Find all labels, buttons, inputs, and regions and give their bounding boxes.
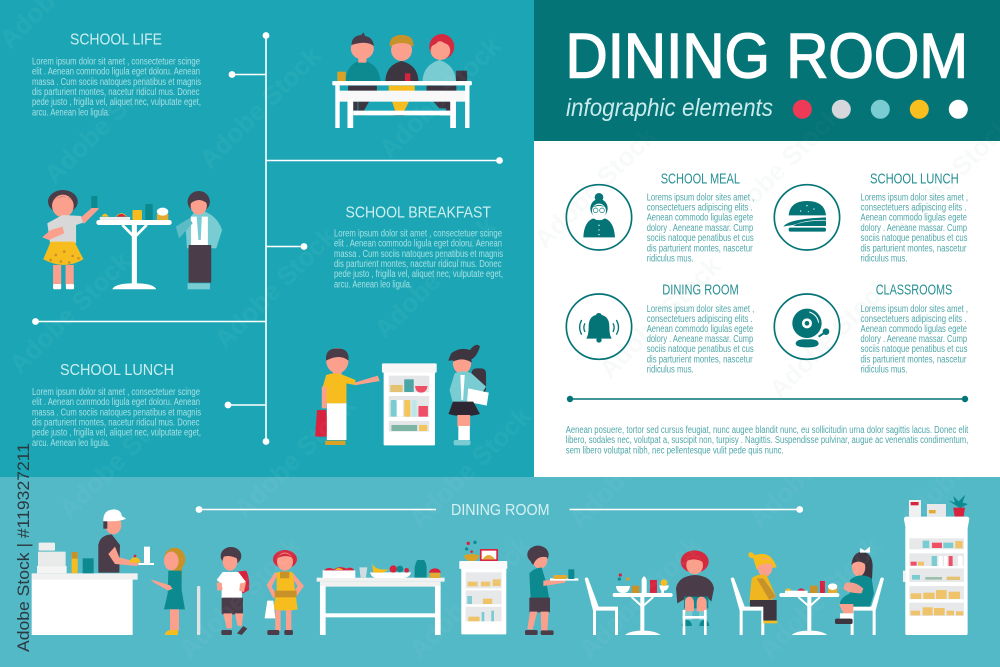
seated girl with red hair [676,550,714,635]
text block: school breakfast: Lorem ipsum dolor sit amet , consectetuer scinge [334,228,502,240]
text block: school lunch (right): consectetuers adipiscing elits . [860,203,966,214]
text block: dining room: Aenean commodo ligulas egete [647,324,754,335]
watermark: faint repeated stock marks: Adobe Stock [38,55,172,189]
text block: dining room: dolory . Aeneane massar. Cump [647,334,754,345]
text block: school lunch (right): Aenean commodo ligulas egete [860,213,967,224]
pastry case with flowers and picture [459,541,507,634]
watermark: faint repeated stock marks: Adobe Stock [208,220,342,354]
watermark: faint repeated stock marks: Adobe Stock [563,400,697,534]
boy in yellow [315,348,378,445]
watermark: faint repeated stock marks: Adobe Stock [193,40,327,174]
panel: bottom dining room strip [0,477,1000,667]
illustration: girl and boy at table [42,190,222,289]
watermark: faint repeated stock marks: Adobe Stock [228,390,362,524]
text block: school lunch (right): sociis natoque penatibus et cus [860,233,968,244]
watermark: faint repeated stock marks: Adobe Stock [373,30,507,164]
girl in yellow dress [265,550,304,635]
menu board and plant [909,495,968,517]
watermark: faint repeated stock marks: Adobe Stock [763,270,897,404]
watermark: faint repeated stock marks: Adobe Stock [3,245,137,379]
text block: school breakfast [334,204,503,290]
icon section: white panel content [566,185,840,359]
text block: school breakfast: dis parturient montes, nacetur ridicul mus. Donec [334,259,502,270]
text block: school breakfast: SCHOOL BREAKFAST [346,204,491,221]
cafe table with food [96,204,172,289]
bottom heading with lines: DINING ROOM [451,502,550,519]
watermark: faint repeated stock marks: Adobe Stock [753,530,887,664]
watermark: faint repeated stock marks: Adobe Stock [528,120,662,254]
text block: dining room: ridiculus mus. [647,364,694,375]
text block: school breakfast: elit . Aenean commodo ligula eget doloru. Aenean [334,239,502,250]
illustration: children at fridge [315,345,489,445]
text block: school life: Lorem ipsum dolor sit amet , consectetuer scinge [32,56,200,68]
subtitle: infographic elements [566,94,773,122]
watermark: faint repeated stock marks: Adobe Stock [403,530,537,664]
text block: school meal: sociis natoque penatibus et cus [647,233,754,244]
text block: school life: elit . Aenean commodo ligula eget doloru. Aenean [32,67,200,78]
bottom heading with lines [196,502,803,519]
footer paragraph [566,425,969,456]
seated girl with white bow and chair [835,547,884,635]
counter with register [32,543,138,635]
text block: school meal: dolory . Aeneane massar. Cump [647,223,754,234]
text block: school meal: consectetuers adipiscing elits . [647,203,753,214]
queue pole [197,586,200,635]
watermark: faint repeated stock marks: Adobe Stock [403,400,537,534]
text block: school lunch (right) [860,170,968,264]
text block: school life: pede justo , frigilla vel, aliquet nec, vulputate eget, [32,97,201,108]
text block: school meal: SCHOOL MEAL [661,170,740,187]
text block: classrooms: ridiculus mus. [860,364,908,375]
text block: school life [32,32,201,118]
text block: school life: massa . Cum sociis natoques penatibus et magnis [32,77,201,88]
text block: school lunch (right): SCHOOL LUNCH [870,170,959,187]
text block: school meal: ridiculus mus. [647,253,694,264]
text block: school meal: Lorems ipsum dolor sites amet , [647,193,754,204]
text block: dining room: Lorems ipsum dolor sites amet , [647,304,754,315]
panel: left teal background [0,0,534,477]
text block: classrooms [860,281,968,375]
text block: school lunch: massa . Cum sociis natoques penatibus et magnis [32,407,201,418]
tall food display case [903,517,969,635]
chair and table left [585,573,673,635]
timeline connector [32,32,503,445]
text block: school life: SCHOOL LIFE [70,32,162,49]
text block: school meal: dis parturient montes, nascetur [647,243,753,254]
text block: school breakfast: pede justo , frigilla vel, aliquet nec, vulputate eget, [334,269,503,280]
text block: school meal [647,170,754,264]
text block: school lunch (right): Lorems ipsum dolor sites amet , [860,193,968,204]
footer paragraph: sem libero volutpat nibh, nec pellentesque vulit pede quis nunc. [566,445,784,456]
watermark: faint repeated stock marks: Adobe Stock [743,400,877,534]
text block: school lunch (right): ridiculus mus. [860,253,908,264]
boy with jacket [176,191,222,289]
text block: school life: dis parturient montes, nacetur ridicul mus. Donec [32,87,200,98]
watermark: faint repeated stock marks: Adobe Stock [53,390,187,524]
text block: school lunch: elit . Aenean commodo ligula eget doloru. Aenean [32,397,200,408]
text block: school lunch: Lorem ipsum dolor sit amet , consectetuer scinge [32,387,200,398]
table right [779,581,839,635]
text block: classrooms: consectetuers adipiscing elits . [860,314,966,325]
text block: school breakfast: massa . Cum sociis natoques penatibus et magnis [334,249,503,260]
text block: classrooms: Aenean commodo ligulas egete [860,324,967,335]
text block: classrooms: CLASSROOMS [876,281,952,298]
colour dots [793,100,968,119]
watermark: adobe stock id: Adobe Stock | #119327211 [14,443,33,652]
text block: school lunch: SCHOOL LUNCH [60,362,174,379]
text block: school lunch: pede justo , frigilla vel, aliquet nec, vulputate eget, [32,428,201,439]
text block: dining room: sociis natoque penatibus et cus [647,344,754,355]
divider with end dots [567,396,968,402]
icon: grandma cook [566,185,632,250]
text block: dining room: consectetuers adipiscing elits . [647,314,753,325]
text block: dining room [647,281,754,375]
text block: school meal: Aenean commodo ligulas egete [647,213,754,224]
seated girl with yellow ponytail and chair [731,552,777,635]
watermark: faint repeated stock marks: Adobe Stock [593,250,727,384]
text block: school breakfast: arcu. Aenean leo ligula. [334,279,412,290]
text block: classrooms: dis parturient montes, nascetur [860,354,967,365]
watermark: faint repeated stock marks: Adobe Stock [173,530,307,664]
watermark: faint repeated stock marks: Adobe Stock [368,210,502,344]
text block: school lunch (right): dolory . Aeneane massar. Cump [860,223,967,234]
girl in teal dress [151,548,185,635]
text block: classrooms: sociis natoque penatibus et cus [860,344,968,355]
text block: school lunch [32,362,201,449]
boy with red backpack [217,547,249,635]
icon: school bell [774,294,840,359]
girl with yellow skirt [42,190,99,289]
illustration: dining area [525,495,969,635]
panel: white icon section [534,141,1000,477]
text block: dining room: DINING ROOM [662,281,739,298]
text block: classrooms: dolory . Aeneane massar. Cump [860,334,967,345]
boy carrying tray [525,546,578,635]
text block: school lunch (right): dis parturient montes, nascetur [860,243,967,254]
title: DINING ROOM [566,22,968,92]
panel: title banner [534,0,1000,141]
icon: burger [774,185,840,250]
illustration: canteen queue [32,509,507,635]
girl with school bag [448,345,489,445]
text block: dining room: dis parturient montes, nascetur [647,354,753,365]
watermark: faint repeated stock marks: Adobe Stock [713,100,847,234]
text block: school lunch: dis parturient montes, nacetur ridicul mus. Donec [32,418,200,428]
buffet table with food [317,560,445,635]
fridge with shelves [382,363,437,445]
illustration: children at bench [332,32,472,128]
text block: classrooms: Lorems ipsum dolor sites amet , [860,304,968,315]
text block: school lunch: arcu. Aenean leo ligula. [32,438,110,449]
text block: school life: arcu. Aenean leo ligula. [32,107,110,118]
cashier [98,509,154,573]
watermark: faint repeated stock marks: Adobe Stock [573,530,707,664]
icon: ringing bell [566,294,632,359]
